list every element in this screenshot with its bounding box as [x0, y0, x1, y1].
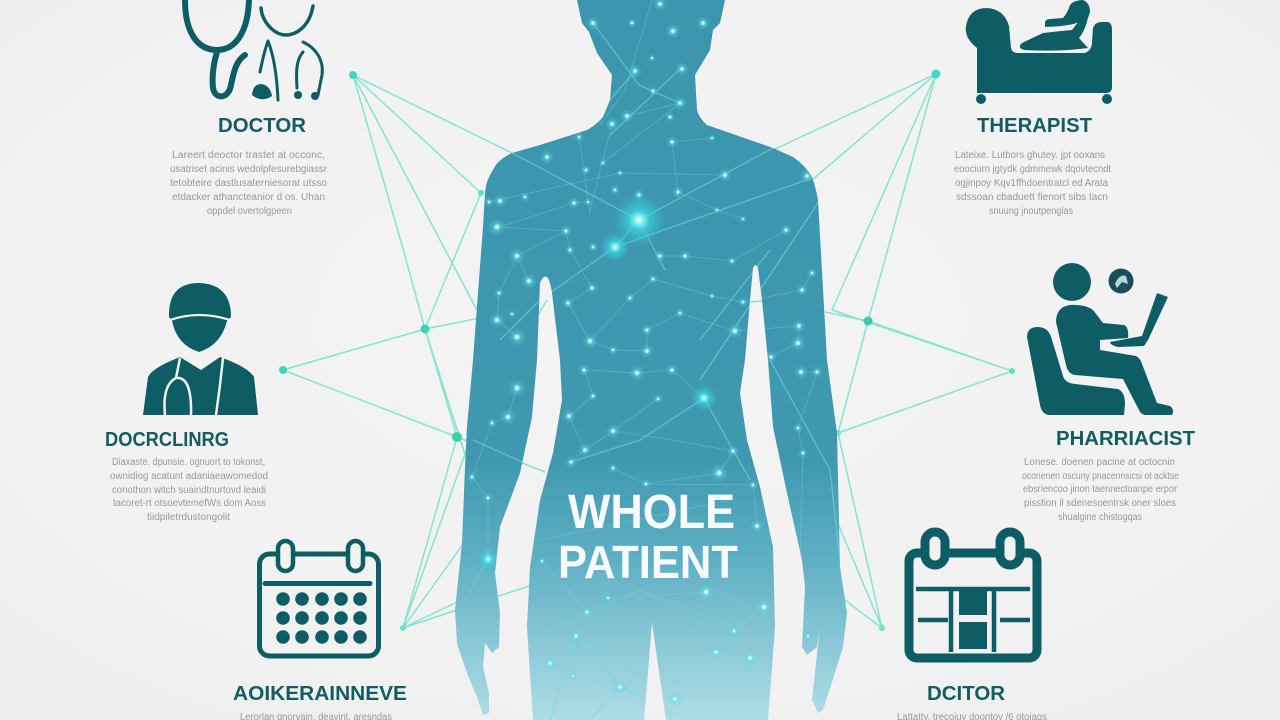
- text block: pharmacist: oconenen oscuny pnacennsicsi ot acktse: [1022, 471, 1179, 482]
- text block: second clinician: [110, 457, 268, 523]
- body network stars: [467, 0, 823, 707]
- text block: doctor: oppdel overtolgpeen: [207, 206, 292, 217]
- body network lines: [465, 0, 840, 720]
- icon: clinician with stethoscope: [143, 283, 258, 415]
- heading: pharmacist: PHARRIACIST: [1056, 428, 1195, 450]
- text block: second clinician: tacoret-rt otsoevtemefWs dom Aoss: [113, 498, 266, 509]
- text block: second clinician: ownidiog acatunt adaniaeawomedod: [110, 471, 268, 482]
- panel: pharmacist (middle right): [1022, 263, 1195, 523]
- text block: doctor: etdacker athancteanior d os. Uhan: [172, 192, 325, 203]
- text block: pharmacist: [1022, 457, 1179, 523]
- panel: doctor (top left): [170, 0, 328, 217]
- text block: second clinician: tiidpiletrdustongolit: [147, 512, 230, 523]
- panel: doctor (bottom right): [897, 532, 1047, 720]
- title: whole patient: PATIENT: [558, 536, 738, 588]
- text block: therapist: snuung jnoutpenglas: [989, 206, 1073, 217]
- text block: doctor: tetobteire dastlusaterniesorat utsso: [170, 178, 327, 189]
- text block: pharmacist: ebsriencoo jinon taennectoanpe erpor: [1023, 484, 1178, 495]
- icon: calendar with dots: [260, 541, 378, 656]
- icon: therapy couch: [966, 0, 1112, 104]
- patient silhouette with neural network: [455, 0, 847, 720]
- heading: therapist: THERAPIST: [977, 115, 1092, 137]
- text block: therapist: Lateixe. Lutbors ghutey. jpt ooxans: [955, 150, 1105, 161]
- heading: doctor: DOCTOR: [218, 115, 307, 137]
- text block: second clinician: conothon witch suaindtnurtovd leaidi: [112, 485, 266, 496]
- text block: pharmacist: shualgine chistogqas: [1058, 512, 1142, 523]
- icon: calendar with grid: [909, 532, 1037, 658]
- network lines connecting care team to the patient: [279, 70, 1015, 631]
- glow at heart: [616, 198, 662, 242]
- text block: therapist: sdssoan cbaduett fienort sibs tacn: [956, 192, 1108, 203]
- text block: pharmacist: pisstion il sdenesoentrsk oner sloes: [1024, 498, 1176, 509]
- panel: appointments (bottom left): [233, 541, 407, 720]
- heading: doctor: DCITOR: [927, 683, 1006, 705]
- text block: doctor: [170, 150, 328, 217]
- text block: doctor: Lareert deoctor trastet at occonc,: [172, 150, 325, 161]
- heading: appointments: AOIKERAINNEVE: [233, 683, 407, 705]
- heading: second clinician: DOCRCLINRG: [105, 429, 229, 451]
- text block: therapist: eoociurn jgtydk gdmmewk dqovtecndt: [954, 164, 1111, 175]
- network nodes: [279, 70, 1015, 631]
- icon: person seated with laptop: [1027, 263, 1173, 415]
- icon: stethoscope and doctor: [185, 0, 322, 100]
- text block: pharmacist: Lonese. doenen pacine at octocnin: [1024, 457, 1175, 468]
- title: whole patient: [558, 486, 738, 588]
- panel: second clinician (middle left): [105, 283, 268, 523]
- title: whole patient: WHOLE: [568, 486, 735, 539]
- text block: second clinician: Diaxaste. dpunsie. ognuort to tokonst,: [112, 457, 265, 468]
- text block: therapist: ogjinpoy Kqv1ffhdoentratcl ed Arata: [955, 178, 1108, 189]
- text block: doctor: usatriset acinis wedolpfesurebgiassr: [170, 164, 328, 175]
- panel: therapist (top right): [954, 0, 1112, 217]
- text block: therapist: [954, 150, 1111, 217]
